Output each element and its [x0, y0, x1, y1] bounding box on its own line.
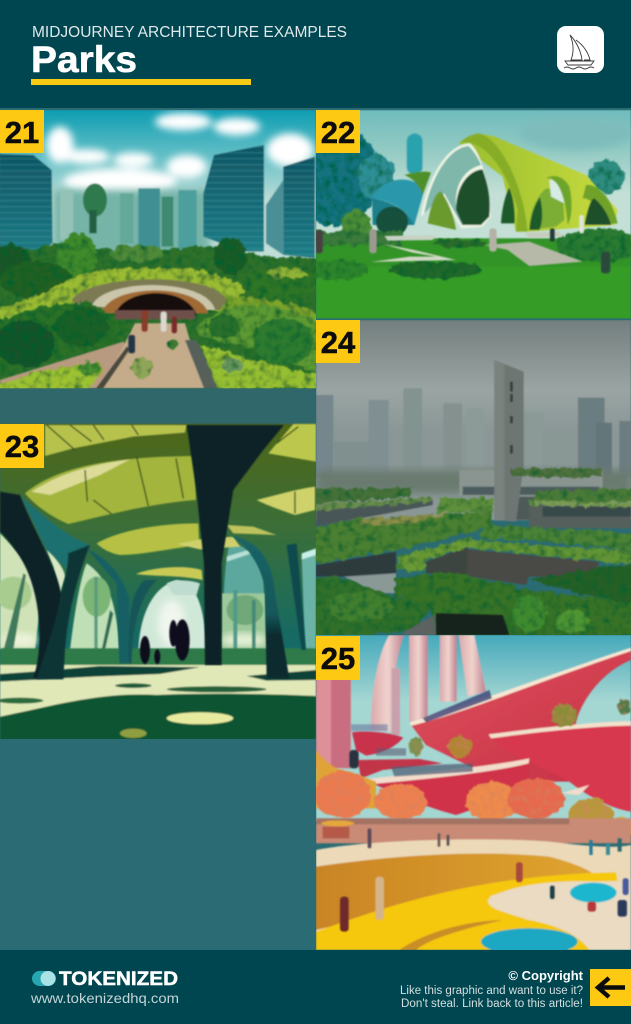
canopy building: [372, 133, 618, 237]
lawn: [316, 238, 631, 320]
plaza ground: [316, 818, 631, 955]
yellow-green skylights: [25, 424, 316, 595]
copyright note: Don't steal. Link back to this article!: [401, 998, 583, 1010]
title: Parks: [31, 39, 137, 80]
trees behind the pavilion: [316, 133, 626, 228]
badge 22: [316, 110, 360, 153]
ceiling: [0, 424, 316, 657]
badge 25: 25: [321, 641, 355, 676]
photo 22: green arched pavilion: [293, 110, 631, 320]
photo 25: red terraces and yellow plaza: [314, 635, 631, 955]
header background: [0, 0, 631, 108]
hedges beside the walkway: [0, 302, 323, 391]
badge 22: 22: [321, 115, 355, 150]
sky and pillars: [316, 635, 631, 822]
website url: www.tokenizedhq.com: [30, 990, 179, 1006]
forest glimpsed through arches: [0, 533, 316, 653]
people and umbrellas: [321, 820, 629, 932]
badge 25: [316, 636, 360, 680]
badge 21: 21: [5, 115, 39, 150]
teal strip below photo: [0, 388, 316, 425]
tunnel: [72, 279, 227, 315]
icon: midjourney sailboat logo: [557, 26, 604, 73]
red terraces: [316, 648, 631, 815]
walkway: [0, 323, 220, 388]
shrubs: [303, 208, 631, 280]
copyright note: © Copyright: [508, 968, 584, 983]
group of people: [140, 619, 190, 664]
misty skyline: [316, 320, 631, 520]
dark gap between hedges: [404, 613, 509, 635]
badge 24: 24: [321, 325, 356, 360]
badge 24: [316, 320, 360, 363]
vegetation: [0, 233, 323, 393]
badge 21: [0, 110, 44, 153]
crowd: [115, 310, 195, 353]
visitors: [316, 215, 610, 273]
terraced hedges: [309, 468, 631, 642]
tokenized logo: TOKENIZED: [59, 969, 178, 990]
sky and city: [0, 110, 316, 277]
photo 24: grey towers and terraced hedges: [309, 320, 631, 642]
footer background: [0, 950, 631, 1024]
orange trees: [314, 699, 631, 840]
copyright note: [400, 968, 584, 1010]
paths: [371, 232, 583, 266]
lawn and shadows: [0, 648, 316, 740]
copyright note: Like this graphic and want to use it?: [400, 985, 583, 997]
photo 21: green tunnel park: [0, 110, 323, 425]
columns: [0, 425, 306, 679]
badge 23: [0, 424, 44, 468]
eyebrow heading: MIDJOURNEY ARCHITECTURE EXAMPLES: [32, 24, 347, 41]
arrow button: [590, 969, 631, 1006]
photo 23: forest canopy pavilion: [0, 424, 316, 740]
badge 23: 23: [5, 429, 39, 464]
title underline: [31, 79, 251, 85]
concrete tower and buildings: [316, 360, 631, 593]
sky and tower: [316, 110, 631, 250]
